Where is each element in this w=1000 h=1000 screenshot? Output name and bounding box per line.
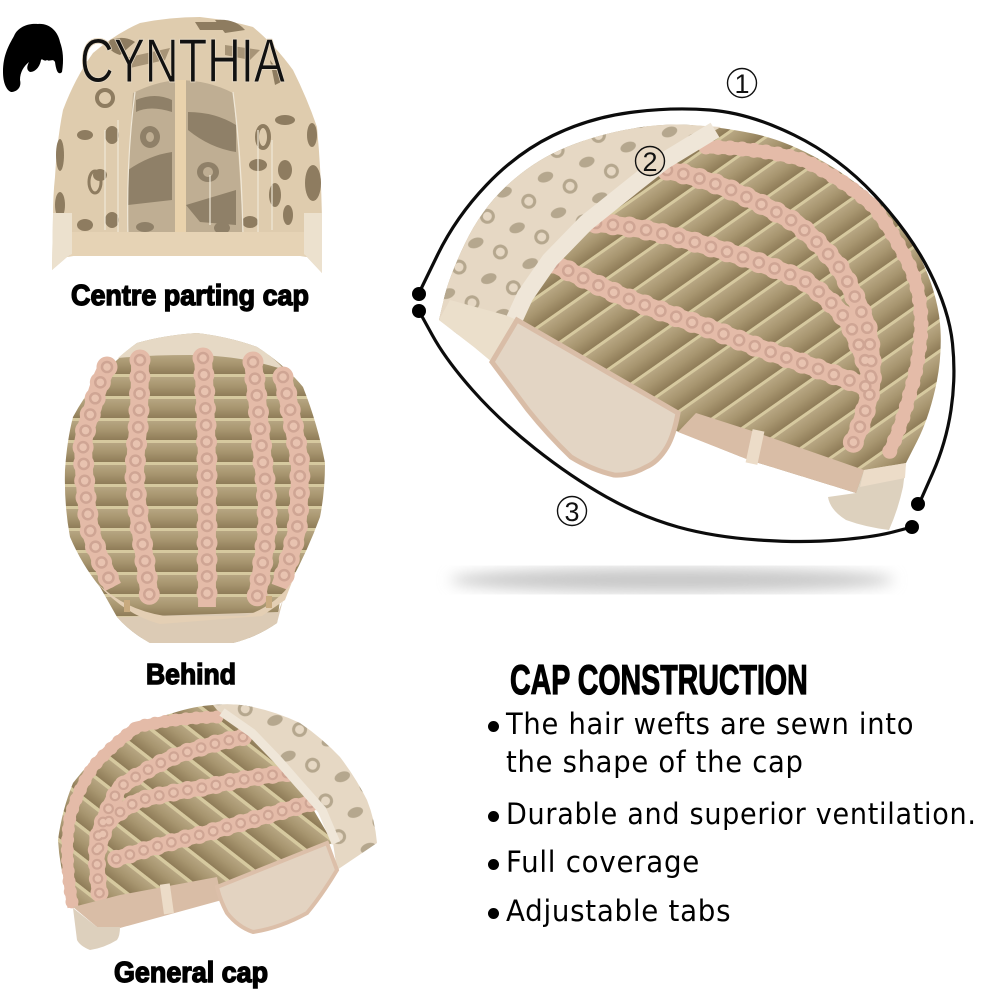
logo: wordmark: CYNTHIA: [80, 27, 285, 96]
heading: cap construction: CAP CONSTRUCTION: [510, 656, 808, 703]
bullet: durable: Durable and superior ventilation.: [506, 797, 977, 831]
bracket arc 3: [419, 311, 912, 542]
top lace: [118, 333, 285, 370]
logo: silhouette icon: [3, 24, 63, 92]
seam threads: [105, 92, 272, 238]
vertical trims: [83, 358, 300, 607]
headband: [73, 877, 222, 928]
cap: general: [58, 704, 377, 950]
lace lower strip: [439, 300, 517, 362]
shadow under main cap: [450, 568, 894, 592]
lace side: [439, 125, 721, 362]
bracket arc 1: [419, 109, 954, 504]
cap: main diagram: [439, 125, 941, 530]
bullet: coverage: Full coverage: [506, 845, 700, 879]
ear tab: [492, 320, 678, 475]
label: behind: Behind: [146, 659, 236, 691]
lower band and side tabs: [70, 232, 305, 256]
ear tab: [217, 843, 337, 932]
number 3: 3: [564, 497, 580, 527]
bullet: tabs: Adjustable tabs: [506, 894, 731, 928]
headband: [678, 413, 864, 493]
bracket end dots: [412, 287, 925, 534]
number 3: [558, 496, 586, 527]
bullet: hair wefts: [488, 707, 914, 779]
trims: [67, 717, 217, 907]
number 2: 2: [642, 147, 658, 177]
bullet: hair wefts: The hair wefts are sewn into: [506, 707, 914, 741]
nape tab: [73, 908, 120, 950]
lace side: [213, 704, 377, 870]
label: centre parting cap: Centre parting cap: [71, 280, 309, 312]
trims: [706, 147, 921, 453]
lace openings, left side: [55, 20, 321, 231]
number 2: [636, 146, 664, 177]
number 1: [728, 68, 756, 99]
cap: behind: [65, 333, 325, 643]
centre parting panel: [128, 80, 243, 240]
label: general cap: General cap: [114, 957, 268, 989]
hair dome: [439, 125, 941, 493]
lower band and nape: [117, 600, 283, 643]
cap: centre parting: [52, 17, 322, 273]
nape tab: [828, 463, 906, 530]
number 1: 1: [734, 69, 750, 99]
lace pale scalloped edge: [514, 130, 715, 320]
bullet: hair wefts: the shape of the cap: [506, 745, 804, 779]
